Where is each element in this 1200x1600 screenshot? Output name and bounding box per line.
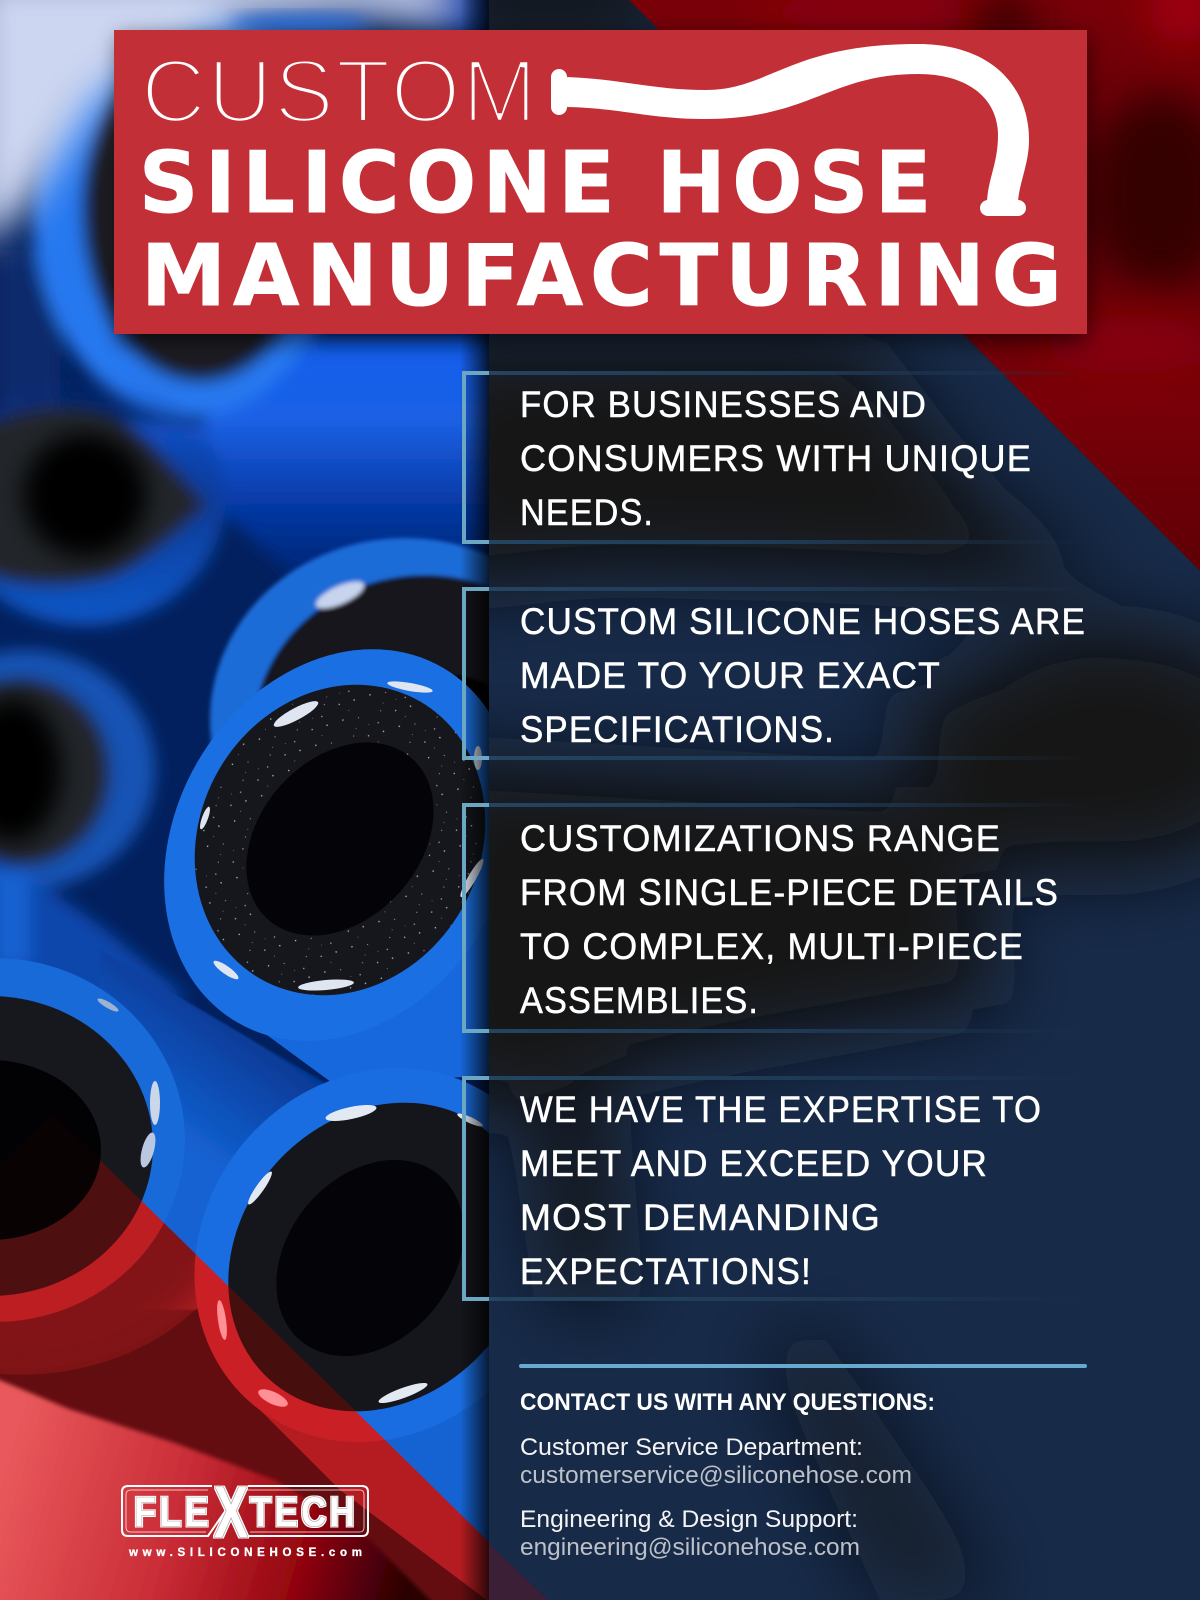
logo URL: www.SILICONEHOSE.com [128, 1547, 362, 1559]
text block 4 [464, 1078, 1090, 1299]
engineering support: Engineering & Design Support: [520, 1506, 858, 1533]
text block 4: WE HAVE THE EXPERTISE TO [520, 1089, 1042, 1130]
engineering support [520, 1506, 860, 1561]
lower-left hose body [0, 1376, 440, 1600]
icon: hose [551, 44, 1029, 216]
customer service: customerservice@siliconehose.com [520, 1462, 912, 1489]
text block 3: TO COMPLEX, MULTI-PIECE [520, 926, 1024, 967]
logo: Flextech: TECH [250, 1488, 358, 1535]
title: SILICONE HOSE: SILICONE HOSE [139, 134, 938, 233]
title: MANUFACTURING: MANUFACTURING [141, 227, 1069, 326]
text block 1: FOR BUSINESSES AND [520, 384, 927, 425]
logo: Flextech: FLE [134, 1488, 212, 1535]
banner shadow [118, 36, 1088, 342]
title: CUSTOM: CUSTOM [141, 42, 537, 142]
text block 1 [464, 373, 1090, 542]
text block 2 [464, 589, 1090, 758]
text block 3: ASSEMBLIES. [520, 980, 759, 1021]
title banner [114, 30, 1087, 334]
customer service [520, 1434, 912, 1489]
text block 4: MOST DEMANDING [520, 1197, 881, 1238]
red tinted corner of photo [0, 1160, 489, 1600]
logo: Flextech: X [214, 1473, 248, 1553]
text block 4: MEET AND EXCEED YOUR [520, 1143, 988, 1184]
customer service: Customer Service Department: [520, 1434, 863, 1461]
text block 2: MADE TO YOUR EXACT [520, 655, 941, 696]
text block 4: EXPECTATIONS! [520, 1251, 812, 1292]
red overlay end on panel [489, 1544, 548, 1600]
text block 1: CONSUMERS WITH UNIQUE [520, 438, 1032, 479]
text block 3 [464, 805, 1090, 1031]
text block 3: FROM SINGLE-PIECE DETAILS [520, 872, 1059, 913]
contact section [519, 1364, 1087, 1561]
photo background: blue silicone hoses [0, 0, 489, 1600]
text block 1: NEEDS. [520, 492, 654, 533]
dark navy right panel [420, 0, 1200, 1600]
text block 2: SPECIFICATIONS. [520, 709, 835, 750]
text block 2: CUSTOM SILICONE HOSES ARE [520, 601, 1086, 642]
contact heading: CONTACT US WITH ANY QUESTIONS: [520, 1389, 935, 1416]
logo: Flextech [122, 1473, 368, 1559]
engineering support: engineering@siliconehose.com [520, 1534, 860, 1561]
text block 3: CUSTOMIZATIONS RANGE [520, 818, 1001, 859]
red triangle top right [620, 0, 1200, 580]
